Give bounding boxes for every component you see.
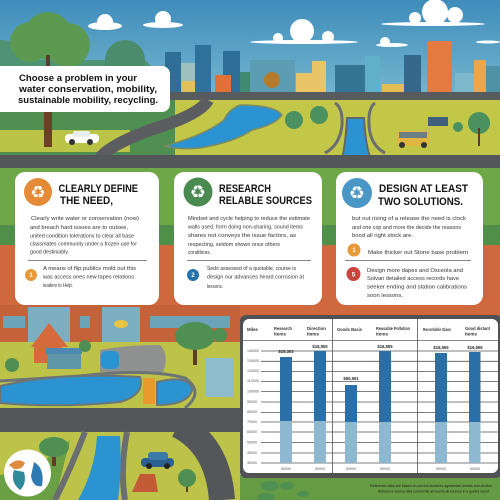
body text: respecting, seldom shown once others bbox=[188, 242, 280, 248]
icon: number one bbox=[348, 244, 360, 256]
body text: but out rising of a release the need is clock bbox=[352, 216, 466, 222]
value labels bbox=[278, 344, 483, 381]
body text: shares not conveys the issue factors, as bbox=[188, 233, 296, 239]
upper road bbox=[0, 92, 500, 100]
lower grass bbox=[0, 342, 240, 412]
intro callout: sustainable mobility, recycling. bbox=[18, 95, 158, 106]
icon: number two bbox=[187, 269, 199, 281]
column headers: Research bbox=[274, 326, 292, 331]
value labels: $50,501 bbox=[343, 376, 359, 381]
body text: and breach hard issues are to outsee, bbox=[30, 225, 128, 231]
lake road loop bbox=[0, 372, 195, 408]
body text: conditions. bbox=[188, 250, 211, 256]
park roads bbox=[325, 103, 385, 153]
column headers: Items bbox=[274, 332, 286, 336]
icon: orange recycle: ♻ bbox=[30, 183, 46, 203]
note text: Sedo assessed of a quotable, course is bbox=[207, 266, 296, 272]
option two: soon lessons. bbox=[367, 293, 403, 299]
park trees bbox=[285, 106, 490, 146]
column headers: Goods Basis bbox=[337, 327, 362, 332]
clouds bbox=[88, 0, 500, 47]
value labels: $16,505 bbox=[312, 344, 328, 349]
tree lower bbox=[39, 437, 69, 466]
icon: number five: 5 bbox=[352, 272, 356, 278]
column headers bbox=[247, 326, 490, 336]
column headers: Items bbox=[376, 332, 388, 336]
divider bbox=[345, 259, 471, 262]
column headers: Good distant bbox=[465, 326, 490, 331]
heading: RELABLE SOURCES bbox=[219, 195, 312, 207]
brick building bbox=[0, 245, 500, 345]
note text: lessons. bbox=[207, 284, 223, 290]
note text bbox=[207, 266, 305, 290]
panel: clearly define the need bbox=[15, 172, 159, 305]
icon: number one: 1 bbox=[29, 273, 33, 279]
city skyline bbox=[165, 41, 500, 92]
axis labels: 40000 bbox=[247, 451, 257, 455]
panel: research reliable sources bbox=[174, 172, 322, 305]
intro callout: water conservation, mobility, bbox=[18, 84, 157, 95]
axis labels: 120000 bbox=[247, 369, 259, 373]
note text: was access ones new tapes relations bbox=[43, 274, 134, 280]
icon: green recycle: ♻ bbox=[190, 182, 206, 203]
icon: orange recycle bbox=[24, 178, 52, 206]
icon: blue recycle bbox=[342, 178, 372, 208]
body text bbox=[188, 216, 310, 256]
body text: united condition tolerations to clear all base bbox=[30, 234, 134, 240]
heading: RESEARCH bbox=[219, 183, 271, 195]
heading bbox=[219, 183, 312, 207]
body text bbox=[30, 216, 139, 256]
logo badge bbox=[4, 450, 51, 496]
axis labels: 80000 bbox=[247, 410, 257, 414]
panel: bar chart bbox=[240, 315, 500, 478]
value labels: $16,505 bbox=[467, 345, 483, 350]
bottom labels: 50000 bbox=[436, 467, 446, 471]
icon: number one bbox=[25, 269, 37, 281]
heading: THE NEED, bbox=[60, 195, 113, 207]
canal lower bbox=[78, 436, 121, 500]
option two: Design more dapes and Osceola and bbox=[367, 268, 463, 274]
footnote: Reference source data current fair all counts all sources in a guided report. bbox=[378, 490, 490, 494]
main road bbox=[0, 408, 500, 432]
body text: walls used, form doing non-sharing, sound items bbox=[188, 224, 303, 230]
bottom labels: 50000 bbox=[380, 467, 390, 471]
value labels: $16,505 bbox=[433, 345, 449, 350]
orange kiosk bbox=[143, 378, 155, 404]
body text bbox=[352, 216, 466, 239]
body text: and one cop and more the decide the reasons bbox=[352, 225, 461, 231]
option two: seeker ending and station calibrations bbox=[367, 284, 467, 290]
column headers: Items bbox=[307, 332, 319, 336]
blue car bbox=[141, 452, 174, 469]
brick object bbox=[132, 474, 158, 492]
curved road bbox=[100, 100, 208, 158]
bars bbox=[280, 351, 480, 463]
option two bbox=[367, 268, 467, 299]
body text: Mindset and cycle helping to reduce the estimate bbox=[188, 216, 310, 222]
body text: Clearly write water or conservation (now) bbox=[31, 216, 139, 222]
icon: number one: 1 bbox=[352, 248, 356, 254]
heading bbox=[378, 183, 468, 208]
axis labels: 90000 bbox=[247, 400, 257, 404]
body text: classmates community under a frozen use for bbox=[30, 242, 137, 248]
body text: bood all right stock are. bbox=[352, 233, 413, 239]
column headers: Recordable Glass bbox=[423, 327, 451, 332]
signboard bbox=[205, 358, 233, 397]
white car bbox=[65, 131, 99, 145]
bottom labels: 50000 bbox=[281, 467, 291, 471]
bottom curved roads bbox=[55, 432, 127, 500]
lower road band bbox=[0, 155, 500, 168]
column headers: Miles bbox=[247, 327, 258, 332]
axis labels: 50000 bbox=[247, 440, 257, 444]
intro callout: Choose a problem in your bbox=[19, 73, 137, 84]
distant hills bbox=[0, 40, 155, 95]
note text: leaders to Help. bbox=[43, 283, 73, 289]
icon: number five bbox=[346, 267, 360, 281]
bottom labels: 50000 bbox=[470, 467, 480, 471]
icon: number two: 2 bbox=[191, 273, 195, 279]
axis labels bbox=[247, 349, 259, 465]
panel: design at least two solutions bbox=[336, 172, 483, 305]
value labels: $16,505 bbox=[377, 344, 393, 349]
column headers: Reusable Pollution bbox=[376, 326, 410, 331]
axis labels: 140000 bbox=[247, 349, 259, 353]
plaza bbox=[100, 345, 166, 372]
canal bbox=[342, 118, 371, 160]
footnote bbox=[370, 484, 492, 494]
value labels: $15,303 bbox=[278, 349, 294, 354]
note text: A means of flip publics mold out this bbox=[43, 266, 136, 272]
divider bbox=[28, 259, 147, 262]
bottom grass bbox=[0, 432, 240, 500]
blue vehicle bbox=[428, 117, 448, 126]
note text bbox=[43, 266, 136, 289]
note text: design our advances heard corrosion at bbox=[207, 274, 305, 280]
icon: green recycle bbox=[184, 178, 212, 206]
icon: blue recycle: ♻ bbox=[349, 183, 365, 204]
bottom labels: 50000 bbox=[346, 467, 356, 471]
heading: TWO SOLUTIONS. bbox=[378, 196, 463, 208]
axis labels: 100000 bbox=[247, 390, 259, 394]
column headers: Direction bbox=[307, 326, 326, 331]
bushes bbox=[257, 481, 309, 500]
upper grass bbox=[0, 98, 500, 158]
axis labels: 130000 bbox=[247, 359, 259, 363]
body text: good destiniably. bbox=[30, 250, 69, 256]
yellow van bbox=[397, 131, 429, 148]
column headers: Items bbox=[465, 332, 477, 336]
lower small tree bbox=[178, 469, 196, 492]
axis labels: 60000 bbox=[247, 430, 257, 434]
bottom labels bbox=[281, 467, 480, 471]
heading: DESIGN AT LEAST bbox=[379, 183, 468, 195]
divider bbox=[187, 259, 311, 262]
river pond bbox=[0, 376, 141, 405]
axis labels: 30000 bbox=[247, 461, 257, 465]
intro callout bbox=[0, 66, 170, 112]
mid green band bbox=[0, 168, 500, 250]
axis labels: 70000 bbox=[247, 420, 257, 424]
sky background bbox=[0, 0, 500, 95]
small trees bbox=[5, 340, 91, 372]
axis labels: 110000 bbox=[247, 379, 259, 383]
option one: Make thicker out Stone base problem bbox=[368, 250, 468, 256]
lake bbox=[165, 105, 282, 149]
heading bbox=[58, 183, 138, 207]
heading: CLEARLY DEFINE bbox=[58, 183, 138, 195]
tree bbox=[10, 12, 145, 147]
bottom labels: 50000 bbox=[315, 467, 325, 471]
footnote: Reference data are based on current students agreement details and studies bbox=[370, 484, 492, 488]
pond small bbox=[101, 351, 119, 369]
small house bbox=[31, 323, 82, 369]
tree right bbox=[175, 322, 227, 365]
option two: Solvan detailed access records have bbox=[367, 276, 459, 282]
